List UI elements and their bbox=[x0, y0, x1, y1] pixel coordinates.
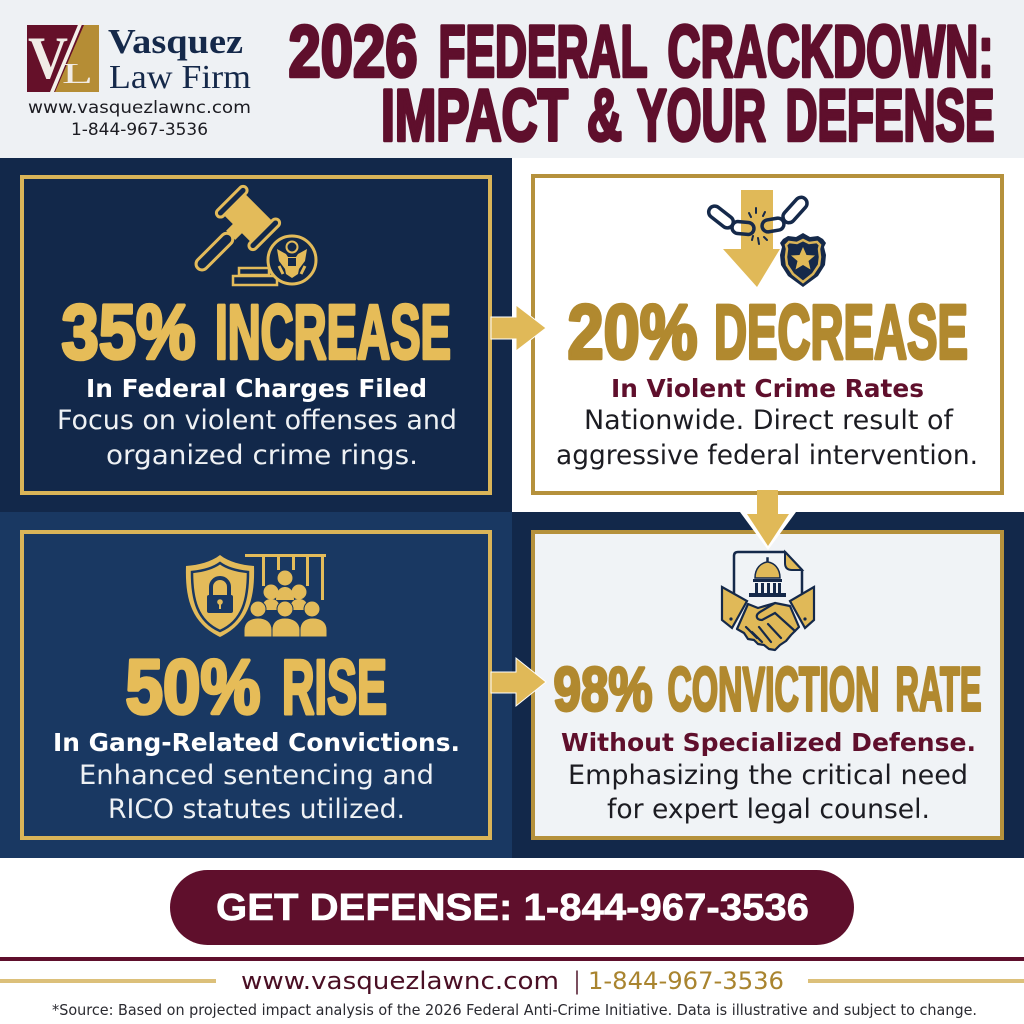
arrow: increase to decrease bbox=[491, 305, 546, 351]
title: 2026 bbox=[288, 12, 418, 92]
header contact: www.vasquezlawnc.com bbox=[28, 98, 251, 118]
logo mark: V bbox=[28, 25, 68, 91]
footer bbox=[0, 957, 1024, 1019]
firm name bbox=[108, 22, 251, 96]
header band bbox=[0, 0, 1024, 158]
icon: arrow, broken chain and badge bbox=[706, 190, 826, 287]
panel: 50% rise bbox=[22, 532, 490, 838]
body text bbox=[568, 760, 968, 825]
subhead: In Violent Crime Rates bbox=[611, 374, 924, 403]
footer contact: | bbox=[574, 967, 580, 995]
footer contact bbox=[241, 967, 784, 995]
source note: *Source: Based on projected impact analysis of the 2026 Federal Anti-Crime Initiative. Data is illustrative and subject to change. bbox=[52, 1001, 977, 1019]
title: YOUR bbox=[637, 76, 766, 156]
title: FEDERAL bbox=[438, 12, 648, 92]
panel backgrounds bbox=[0, 158, 1024, 858]
panel: 98% conviction rate bbox=[533, 532, 1002, 838]
body text bbox=[79, 760, 434, 825]
body text: Enhanced sentencing and bbox=[79, 760, 434, 791]
header contact: 1-844-967-3536 bbox=[71, 120, 208, 140]
body text: for expert legal counsel. bbox=[607, 794, 930, 825]
arrow: decrease to conviction bbox=[740, 490, 796, 550]
arrow: rise to conviction bbox=[491, 658, 546, 706]
panel: 20% decrease bbox=[533, 176, 1002, 493]
title: IMPACT bbox=[381, 76, 568, 156]
stat: INCREASE bbox=[215, 290, 451, 376]
header contact bbox=[28, 98, 251, 140]
title bbox=[288, 12, 994, 156]
body text: Emphasizing the critical need bbox=[568, 760, 968, 791]
body text: RICO statutes utilized. bbox=[108, 794, 405, 825]
stat bbox=[62, 290, 451, 376]
stat: 50% bbox=[126, 644, 260, 730]
icon: gavel and seal bbox=[179, 185, 316, 287]
body text: organized crime rings. bbox=[106, 440, 418, 471]
panel: 35% increase bbox=[22, 177, 490, 493]
title: & bbox=[587, 76, 622, 156]
firm name: Law Firm bbox=[109, 59, 251, 96]
stat bbox=[126, 644, 387, 730]
body text: Nationwide. Direct result of bbox=[584, 405, 954, 436]
firm name: Vasquez bbox=[108, 22, 243, 61]
subhead: Without Specialized Defense. bbox=[561, 728, 976, 757]
stat: RISE bbox=[282, 644, 387, 730]
icon: capitol document and handshake bbox=[722, 552, 814, 650]
stat: 35% bbox=[62, 290, 196, 376]
call to action button: GET DEFENSE: 1-844-967-3536 bbox=[216, 887, 809, 929]
body text bbox=[57, 405, 457, 471]
logo mark: L bbox=[62, 58, 93, 90]
footer contact: www.vasquezlawnc.com bbox=[241, 967, 559, 995]
subhead: In Gang-Related Convictions. bbox=[53, 728, 460, 757]
subhead: In Federal Charges Filed bbox=[86, 374, 427, 403]
call to action button bbox=[170, 870, 854, 945]
logo mark bbox=[27, 20, 99, 92]
stat bbox=[554, 656, 982, 724]
stat: 98% bbox=[554, 656, 652, 724]
icon: shield, lock and group behind bars bbox=[186, 554, 327, 637]
footer contact: 1-844-967-3536 bbox=[588, 967, 784, 995]
stat bbox=[568, 290, 968, 376]
body text bbox=[556, 405, 978, 471]
stat: 20% bbox=[568, 290, 698, 376]
body text: Focus on violent offenses and bbox=[57, 405, 457, 436]
body text: aggressive federal intervention. bbox=[556, 440, 978, 471]
